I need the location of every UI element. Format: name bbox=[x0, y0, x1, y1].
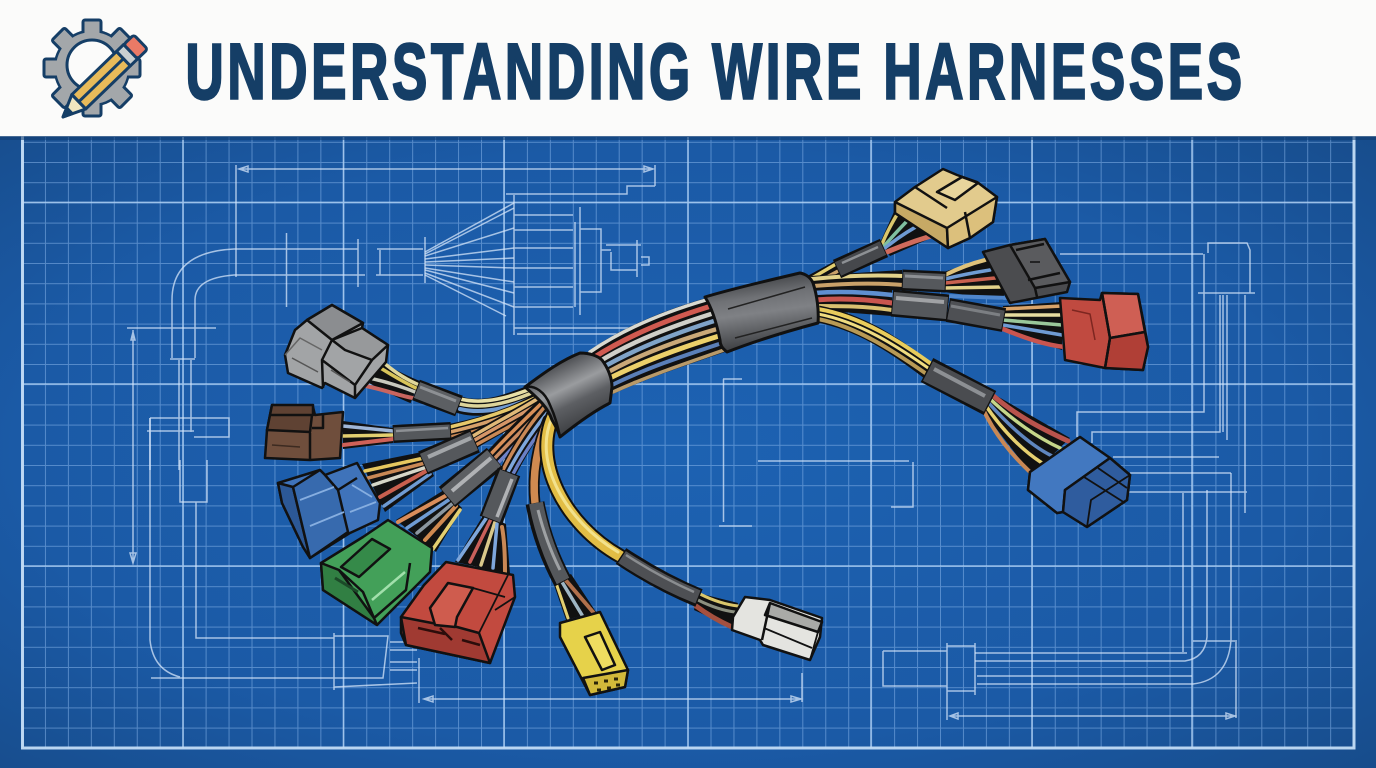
wires: green connector branch bbox=[396, 399, 554, 552]
icon: pencil bbox=[56, 35, 148, 124]
sleeve: right main bbox=[705, 273, 818, 352]
connector: blue right bbox=[1028, 437, 1130, 527]
wires: lower right branches bbox=[814, 288, 1070, 475]
sketch: lower-left pipe bbox=[150, 418, 802, 703]
connector: white bbox=[732, 597, 822, 660]
connector: red right bbox=[1060, 293, 1148, 370]
wires: grey connector branch bbox=[360, 358, 540, 411]
wires: upper right branches bbox=[811, 205, 1008, 300]
sleeve: blue branch right bbox=[927, 369, 990, 403]
blueprint sketch lines bbox=[127, 165, 1255, 720]
sleeve: brown branch bbox=[393, 428, 451, 434]
harness drawing bbox=[343, 205, 1070, 628]
connector: green bbox=[321, 520, 432, 625]
sleeve: left main bbox=[525, 353, 612, 437]
connector: brown bbox=[265, 405, 343, 460]
wires: brown connector branch bbox=[343, 398, 538, 449]
connector: blue left bbox=[278, 463, 380, 558]
connector: black bbox=[983, 239, 1070, 303]
wires: red connector branch bbox=[455, 402, 557, 574]
branch sleeves bbox=[393, 247, 1004, 598]
sleeve: grey branch bbox=[416, 387, 459, 406]
sleeve: tan branch bbox=[837, 247, 884, 269]
title: UNDERSTANDING WIRE HARNESSES bbox=[186, 28, 1242, 116]
wires: yellow connector branch bbox=[534, 420, 596, 620]
wires: white connector branch bbox=[546, 412, 738, 628]
sleeve: red branch outer bbox=[892, 298, 948, 308]
connector: tan bbox=[895, 169, 997, 248]
icon: gear and pencil bbox=[44, 20, 148, 124]
sleeve: red branch inner bbox=[948, 306, 1004, 320]
sketch: right pipe and fittings bbox=[883, 243, 1255, 720]
sketch: left elbow and dimension bbox=[127, 233, 365, 563]
sleeve: green branch bbox=[447, 458, 495, 497]
sleeve: blue branch bbox=[423, 438, 475, 463]
connector: red left bbox=[401, 562, 515, 663]
connector: grey bbox=[285, 305, 388, 398]
sleeve: yellow branch bbox=[535, 503, 563, 582]
header band bbox=[0, 0, 1376, 140]
sleeve: white branch bbox=[621, 555, 699, 598]
connector: yellow bbox=[560, 612, 628, 695]
sleeve: red branch bbox=[491, 472, 512, 520]
wires: blue connector branch bbox=[362, 396, 548, 512]
wires: main trunk bbox=[590, 298, 725, 394]
icon: gear bbox=[44, 20, 140, 116]
sketch: centre bracket bbox=[719, 379, 913, 526]
sleeve: black branch bbox=[902, 276, 946, 282]
sketch: top dimension and fan drawing bbox=[236, 165, 660, 335]
